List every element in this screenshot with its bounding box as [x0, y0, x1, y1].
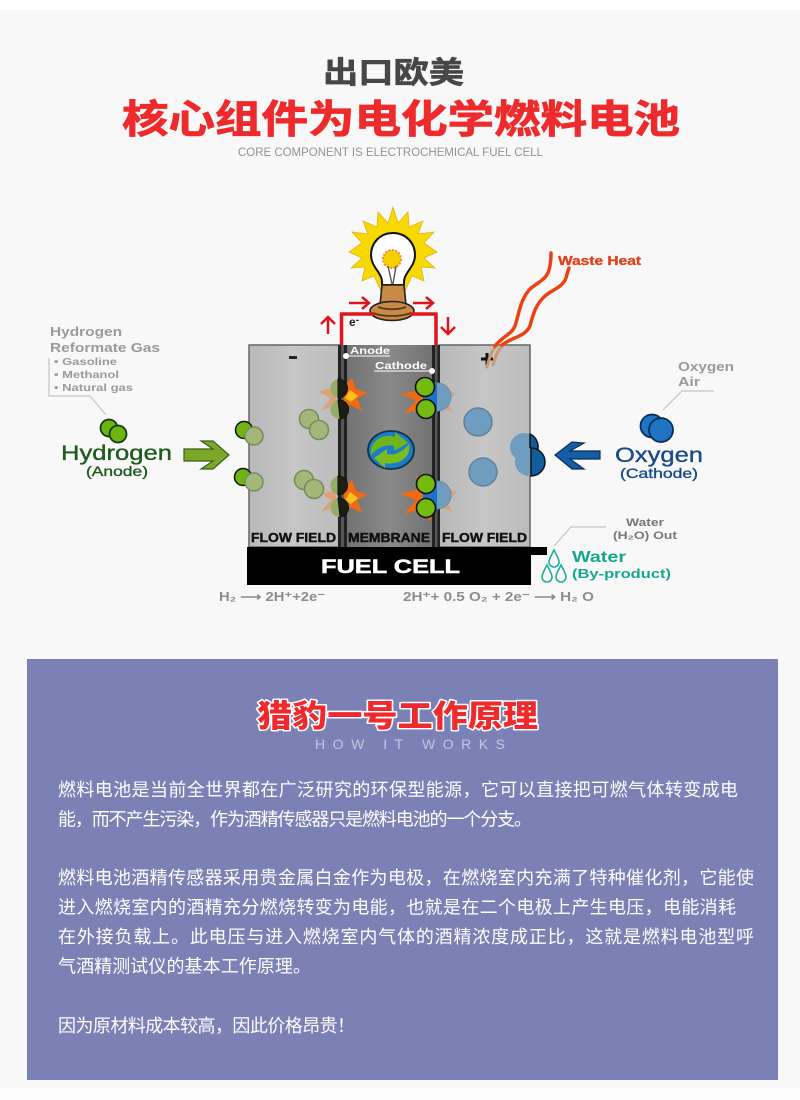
panel: left flow field [249, 345, 339, 547]
paragraph: intro [58, 780, 738, 830]
panel background [27, 659, 778, 1080]
cathode label [374, 360, 435, 374]
flow field and membrane labels: MEMBRANE [348, 531, 430, 545]
icon: water drops [542, 550, 566, 582]
paragraph: principle: 气酒精测试仪的基本工作原理。 [58, 956, 311, 976]
external circuit wire [342, 314, 436, 345]
paragraph: principle: 燃料电池酒精传感器采用贵金属白金作为电极，在燃烧室内充满了特种催化剂，它能使 [58, 868, 754, 888]
panel: how it works [27, 659, 778, 1080]
waste heat flames [487, 253, 569, 367]
electron label: e [349, 315, 356, 329]
hydrogen molecules in flow field [294, 410, 328, 498]
panel: membrane [347, 345, 432, 547]
fuel cell base [247, 547, 547, 585]
heading: export to Europe and America: 出口欧美 [323, 57, 464, 90]
paragraph: intro: 燃料电池是当前全世界都在广泛研究的环保型能源，它可以直接把可燃气体转变成电 [58, 780, 738, 800]
fuel cell base: FUEL CELL [321, 557, 461, 578]
water label [572, 549, 671, 581]
hydrogen source note: • Gasoline [54, 356, 117, 368]
minus sign [289, 356, 297, 359]
reaction: top right [400, 378, 456, 418]
icon: membrane recycling [368, 431, 414, 469]
oxygen molecules in flow field [464, 408, 497, 486]
hydrogen label: Hydrogen [61, 442, 172, 465]
diagram: fuel cell [49, 207, 734, 604]
subtitle: CORE COMPONENT IS ELECTROCHEMICAL FUEL CELL [238, 145, 543, 159]
arrow: oxygen inlet [555, 442, 600, 469]
oxygen molecules at entry [510, 433, 545, 476]
paragraph: intro: 能，而不产生污染，作为酒精传感器只是燃料电池的一个分支。 [58, 810, 532, 830]
panel subheading: HOW IT WORKS [315, 736, 505, 752]
electron arrows [321, 297, 455, 334]
paragraph: principle: 进入燃烧室内的酒精充分燃烧转变为电能，也就是在二个电极上产生电压，电能消耗 [58, 898, 736, 918]
plus sign [481, 353, 493, 365]
panel heading: 猎豹一号工作原理 [257, 699, 538, 734]
oxygen label [615, 443, 703, 481]
paragraph: price: 因为原材料成本较高，因此价格昂贵！ [58, 1016, 355, 1036]
anode label: Anode [350, 345, 390, 357]
water out note: Water [626, 517, 665, 529]
cathode bar [432, 345, 440, 547]
water label: Water [572, 549, 626, 566]
hydrogen source note: Hydrogen [50, 325, 122, 339]
hydrogen source note: • Methanol [54, 369, 119, 381]
oxygen source note [663, 359, 734, 410]
oxygen label: Oxygen [615, 443, 703, 467]
flow field and membrane labels: FLOW FIELD [251, 531, 336, 545]
panel: right flow field [439, 345, 530, 547]
reaction: bottom left [321, 476, 368, 517]
waste heat label: Waste Heat [558, 254, 642, 268]
hydrogen source note: • Natural gas [54, 382, 133, 394]
water out note [554, 517, 677, 546]
oxygen label: (Cathode) [620, 465, 698, 481]
hydrogen source note [49, 325, 160, 415]
paragraph: principle: 在外接负载上。此电压与进入燃烧室内气体的酒精浓度成正比，这就是燃料电池型呼 [58, 927, 754, 947]
electron label: - [356, 315, 359, 326]
anode equation: H₂ ⟶ 2H⁺+2e⁻ [219, 589, 325, 604]
hydrogen molecules at entry [234, 422, 263, 491]
icon: hydrogen molecule [100, 420, 126, 442]
anode label [343, 345, 390, 359]
hydrogen source note: Reformate Gas [50, 341, 160, 355]
cathode equation: 2H⁺+ 0.5 O₂ + 2e⁻ ⟶ H₂ O [403, 589, 594, 604]
flow field and membrane labels: FLOW FIELD [442, 531, 527, 545]
arrow: hydrogen inlet [184, 441, 229, 469]
reaction: bottom right [400, 474, 457, 522]
cathode label: Cathode [375, 360, 427, 372]
hydrogen label [61, 442, 172, 479]
icon: light bulb [349, 207, 437, 320]
anode bar [338, 345, 347, 547]
reaction: top left [319, 378, 368, 419]
icon: oxygen molecule [640, 414, 673, 442]
title: core component: 核心组件为电化学燃料电池 [122, 99, 680, 142]
flow field and membrane labels [251, 531, 527, 545]
paragraph: principle [58, 868, 754, 976]
water out note: (H₂O) Out [613, 530, 677, 542]
oxygen source note: Oxygen [678, 359, 734, 374]
hydrogen label: (Anode) [86, 463, 148, 479]
water label: (By-product) [572, 566, 671, 581]
oxygen source note: Air [678, 374, 700, 389]
